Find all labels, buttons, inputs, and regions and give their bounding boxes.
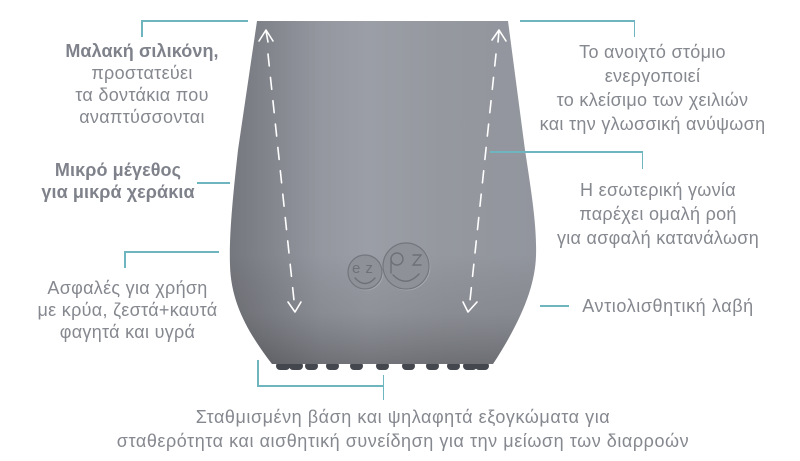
text: inner angle: για ασφαλή κατανάλωση [557, 228, 759, 248]
leader line: weighted base [257, 360, 384, 400]
leader line: small size [197, 182, 230, 184]
text: safe use [37, 278, 218, 342]
text: weighted base [117, 407, 689, 451]
logo: ez pz [348, 243, 430, 290]
text: open mouth: και την γλωσσική ανύψωση [540, 114, 765, 134]
text: soft silicone: Μαλακή σιλικόνη, [65, 41, 219, 61]
text: soft silicone: προστατεύει [91, 63, 193, 83]
text: weighted base: σταθερότητα και αισθητική συνείδηση για την μείωση των διαρροών [117, 431, 689, 451]
leader line: soft silicone [141, 20, 248, 37]
text: open mouth [540, 42, 765, 134]
text: safe use: Ασφαλές για χρήση [47, 278, 208, 298]
text: small size [41, 160, 195, 202]
leader line: safe use [124, 251, 219, 268]
text: inner angle: παρέχει ομαλή ροή [579, 204, 737, 224]
text: safe use: με κρύα, ζεστά+καυτά [37, 300, 218, 320]
text: non-slip handle: Αντιολισθητική λαβή [582, 296, 754, 316]
cup feet [276, 362, 489, 370]
logo: ez pz: ez [352, 260, 378, 277]
text: open mouth: Το ανοιχτό στόμιο [579, 42, 726, 62]
arrow: left dashed double arrow [259, 30, 301, 312]
text: soft silicone [65, 41, 219, 127]
text: open mouth: το κλείσιμο των χειλιών [557, 90, 748, 110]
text: open mouth: ενεργοποιεί [605, 66, 700, 86]
text: soft silicone: τα δοντάκια που [75, 85, 209, 105]
text: soft silicone: αναπτύσσονται [79, 107, 205, 127]
text: inner angle: Η εσωτερική γωνία [580, 180, 736, 200]
text: small size: για μικρά χεράκια [41, 182, 195, 202]
leader line: open mouth [520, 20, 635, 37]
text: safe use: φαγητά και υγρά [60, 322, 195, 342]
leader line: inner angle [490, 151, 643, 169]
arrow: right dashed double arrow [463, 30, 506, 312]
text: small size: Μικρό μέγεθος [55, 160, 181, 180]
leader line: non-slip handle [540, 305, 569, 306]
cup body [230, 21, 536, 364]
text: weighted base: Σταθμισμένη βάση και ψηλαφητά εξογκώματα για [196, 407, 610, 427]
text: inner angle [557, 180, 759, 248]
